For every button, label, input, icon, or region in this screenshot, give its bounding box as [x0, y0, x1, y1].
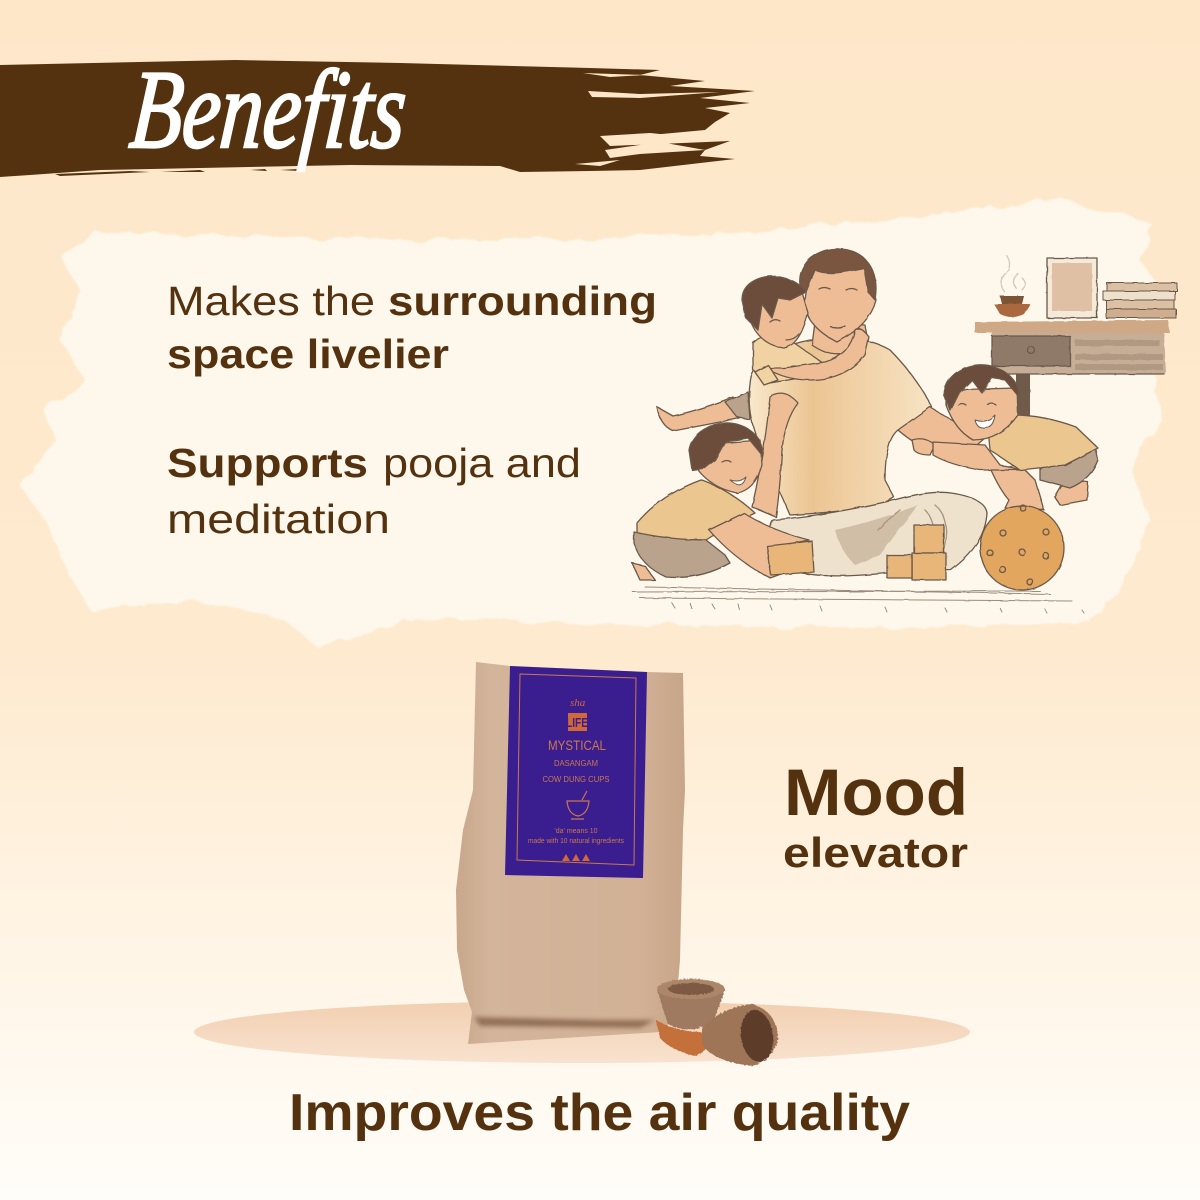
ball	[980, 506, 1064, 590]
panel: cream brush panel	[20, 198, 1170, 645]
triangles	[562, 854, 590, 861]
kid 3 shorts	[1040, 445, 1098, 488]
bag shadow fold	[474, 1017, 655, 1028]
icon: mortar and pestle	[567, 791, 589, 819]
text block: supports pooja and meditation: meditation	[167, 496, 390, 542]
kid 3 shirt	[987, 415, 1098, 470]
label: mood elevator: elevator	[783, 829, 968, 876]
blue label: made with 10 natural ingredients	[528, 838, 624, 845]
product: kraft bag	[456, 662, 685, 1044]
bowl and steam	[994, 304, 1030, 317]
kid 1 leg	[657, 397, 740, 431]
header brush stroke	[0, 60, 755, 177]
text block: makes the surrounding space livelier: Makes the	[167, 278, 375, 324]
block	[767, 541, 814, 575]
kid 3 arm	[933, 442, 1020, 470]
text block: supports pooja and meditation: pooja and	[383, 440, 581, 486]
table	[975, 320, 1170, 420]
kid 1 shirt	[753, 336, 830, 383]
father arm right	[898, 407, 985, 455]
kid 3 head	[946, 388, 1018, 440]
clay dish	[656, 1020, 715, 1056]
disc under product	[194, 1001, 970, 1063]
kid 1 head	[752, 285, 808, 348]
blue label: sha	[570, 697, 586, 709]
blue label: COW DUNG CUPS	[542, 774, 610, 784]
label: mood elevator: Mood	[784, 755, 968, 829]
floor lines	[632, 587, 1084, 613]
kid 2 arm reaching	[752, 394, 798, 517]
text block: makes the surrounding space livelier: surrounding	[388, 278, 657, 324]
blue label: LIFE	[566, 715, 588, 730]
blue label: DASANGAM	[554, 759, 598, 768]
blue label	[505, 666, 647, 878]
upright cup	[657, 981, 725, 1030]
blue label: 'da' means 10	[554, 828, 598, 835]
text block: makes the surrounding space livelier	[167, 278, 657, 377]
product: dung cups	[656, 979, 778, 1066]
title: Benefits	[126, 49, 411, 172]
father torso	[749, 340, 932, 515]
kid 2 arm	[709, 513, 809, 578]
kid 2 shirt	[637, 480, 755, 540]
father head	[805, 265, 876, 342]
kid 1 arm	[766, 329, 869, 380]
tipped cup	[702, 1004, 778, 1066]
kid 2 shorts	[634, 532, 730, 577]
logo	[568, 713, 587, 731]
kid 3 leg	[991, 465, 1044, 510]
kid 2 head	[698, 440, 762, 493]
frame	[1047, 258, 1097, 318]
text block: supports pooja and meditation: Supports	[167, 440, 368, 486]
bag body	[456, 662, 685, 1044]
books	[1103, 283, 1177, 318]
text block: makes the surrounding space livelier: space livelier	[167, 331, 449, 377]
label: mood elevator	[783, 755, 968, 876]
blocks	[887, 525, 946, 580]
father legs	[762, 492, 987, 576]
illustration: father and children playing	[632, 249, 1177, 613]
blue label: MYSTICAL	[548, 737, 606, 753]
text block: supports pooja and meditation	[167, 440, 581, 542]
father neck	[812, 322, 868, 354]
label: improves the air quality: Improves the air quality	[289, 1084, 910, 1142]
